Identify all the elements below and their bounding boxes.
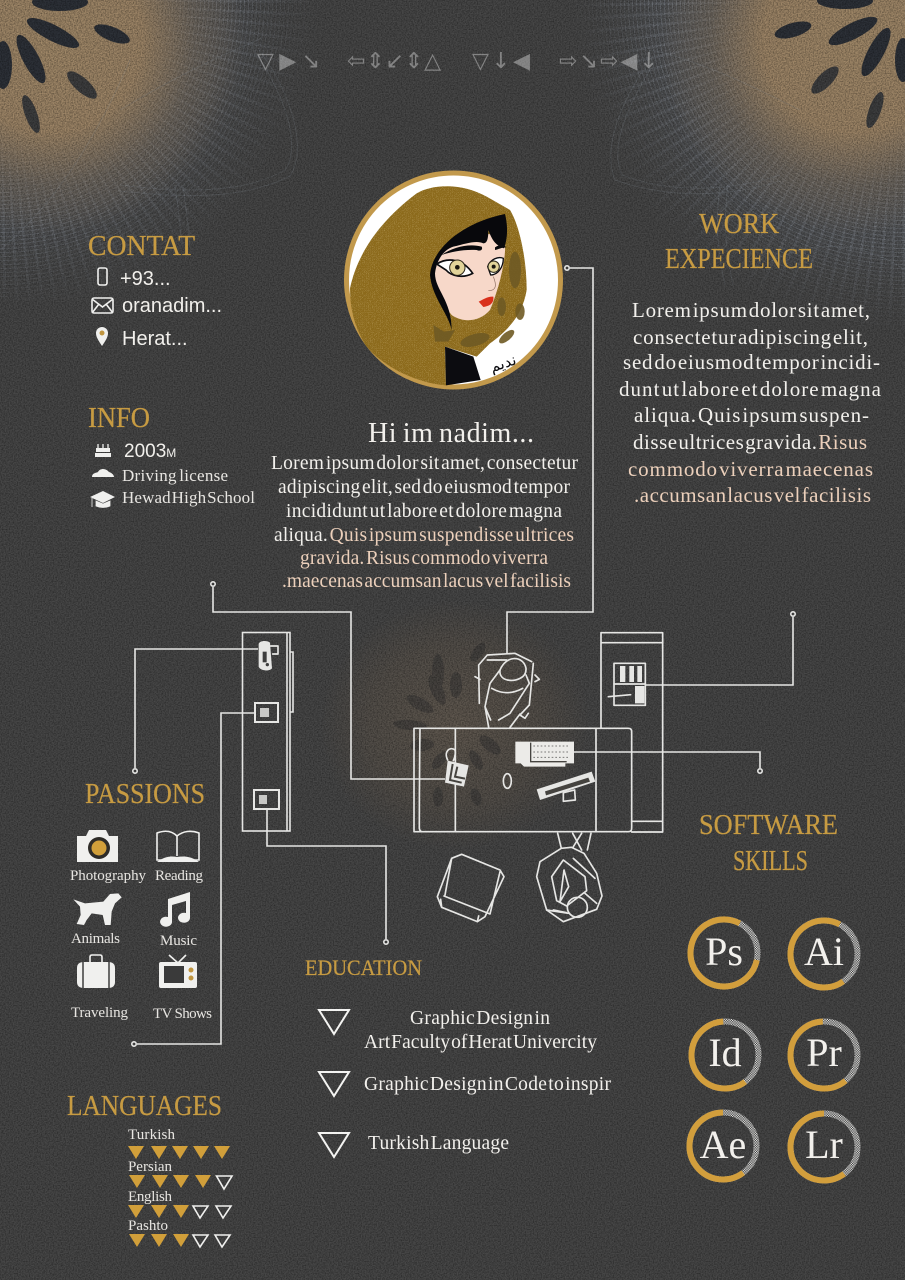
contact: location [96,327,188,350]
center glow mandala [320,600,590,850]
passion: photography [70,830,146,884]
square device 1 [255,703,278,722]
passion: music [160,892,197,949]
info: birth year: 2003M [124,441,176,462]
connector lines [132,266,795,1046]
intro heading: Hi im nadim... [368,418,534,449]
work paragraph: disse ultrices gravida. Risus [633,430,867,454]
skill: Id [678,1008,772,1102]
info: school: Hewad High School [122,488,255,507]
heading: work experience: EXPECIENCE [665,243,813,275]
heading: work experience: WORK [699,208,779,240]
heading: software skills [699,809,838,877]
face [433,234,505,320]
education item 1: Graphic Design in [410,1008,550,1029]
eyes [437,260,473,276]
work paragraph: sed do eiusmod tempor incidi- [623,350,880,374]
skill: Ae: Ae [700,1122,746,1167]
tray [608,663,645,705]
work paragraph: .accumsan lacus vel facilisis [634,483,871,507]
corner arcs: top left [0,38,297,250]
hair [430,214,507,330]
education item 1: Art Faculty of Herat Univercity [364,1032,597,1053]
bottom figure [537,833,602,922]
language: english [128,1189,231,1218]
skill: Lr: Lr [805,1122,843,1167]
intro paragraph: adipiscing elit, sed do eiusmod tempor [278,477,570,498]
education item 3 [319,1133,509,1157]
portrait [346,173,560,387]
language: persian [128,1159,232,1189]
heading: passions: PASSIONS [85,778,205,810]
ruler [537,772,595,801]
passion: reading: Reading [155,868,204,884]
heading: education: EDUCATION [305,955,422,980]
skill: Ae [676,1099,770,1193]
work paragraph: dunt ut labore et dolore magna [619,377,882,401]
info: driving license: Driving license [122,466,228,485]
armchair [437,854,504,922]
top symbol row: ▽▶↘ [257,49,320,74]
passion: tv shows: TV Shows [153,1006,212,1022]
intro paragraph: aliqua. Quis ipsum suspendisse ultrices [274,525,574,546]
keyboard [515,742,574,767]
hood [350,186,527,385]
language: pashto [128,1218,230,1247]
lips [479,297,493,307]
skill: Pr [777,1008,871,1102]
background ornament: top left corner [0,0,330,300]
work paragraph: commodo viverra maecenas [628,457,873,481]
heading: software skills: SKILLS [733,845,808,877]
heading: languages: LANGUAGES [67,1090,222,1122]
intro paragraph: gravida. Risus commodo viverra [300,548,548,569]
intro paragraph: Lorem ipsum dolor sit amet, consectetur [271,453,578,474]
passion: traveling [71,955,128,1021]
work paragraph: consectetur adipiscing elit, [633,325,868,349]
work paragraph [619,298,882,507]
corner arcs: top right [611,50,905,285]
heading: contact: CONTAT [88,230,195,262]
passion: traveling: Traveling [71,1005,128,1021]
contact: phone [98,268,171,290]
skill: Pr: Pr [806,1030,842,1075]
skill: Ai: Ai [804,929,844,974]
education item 3: Turkish Language [368,1133,509,1154]
language: persian: Persian [128,1159,172,1175]
education item 2: Graphic Design in Code to inspir [364,1074,612,1095]
skill: Ps: Ps [705,929,743,974]
language: turkish: Turkish [128,1127,176,1143]
contact: email: oranadim... [122,295,222,317]
skill: Id: Id [708,1030,742,1075]
desk [414,728,632,832]
right cabinet [601,633,663,832]
contact: phone: +93... [120,268,171,290]
top symbol row [257,49,658,74]
signature: ندیم [488,351,519,376]
language: english: English [128,1189,172,1205]
top symbol row: ▽↓◀ [472,49,530,74]
passion: music: Music [160,933,197,949]
background ornament: top right corner [575,0,905,330]
work paragraph: aliqua. Quis ipsum suspen- [634,403,869,427]
language: pashto: Pashto [128,1218,168,1234]
square device 2 [254,790,279,809]
intro paragraph [271,453,578,592]
intro paragraph: incididunt ut labore et dolore magna [286,501,562,522]
passion: photography: Photography [70,868,146,884]
desk scene [414,633,663,922]
passion: reading [155,831,204,884]
work paragraph: Lorem ipsum dolor sit amet, [632,298,870,322]
skill: Ps [684,913,764,993]
heading: software skills: SOFTWARE [699,809,838,841]
contact: location: Herat... [122,328,188,350]
heading: info: INFO [88,402,150,434]
scarf shadows [433,252,525,350]
language: turkish [128,1127,230,1159]
skill: Ai [777,907,871,1001]
eyebrows [442,245,482,255]
passion: tv shows [153,955,212,1022]
top figure [475,653,539,727]
corner petals: top right [773,0,905,130]
nose [488,277,495,291]
skill: Lr [777,1100,871,1194]
intro paragraph: .maecenas accumsan lacus vel facilisis [282,571,571,592]
passion: animals [71,893,122,947]
left cabinet [242,632,293,831]
phone on cabinet [259,641,278,670]
top symbol row: ⇦⇕↙⇕△ [347,49,441,74]
clothing [445,347,481,385]
education item 1 [319,1008,597,1053]
info: birth year [95,441,176,462]
desk phone [445,749,469,787]
mouse [503,774,511,788]
heading: work experience [665,208,813,275]
top symbol row: ⇨↘⇨◀↓ [559,49,658,74]
passion: animals: Animals [71,931,120,947]
corner petals: top left [0,0,132,135]
